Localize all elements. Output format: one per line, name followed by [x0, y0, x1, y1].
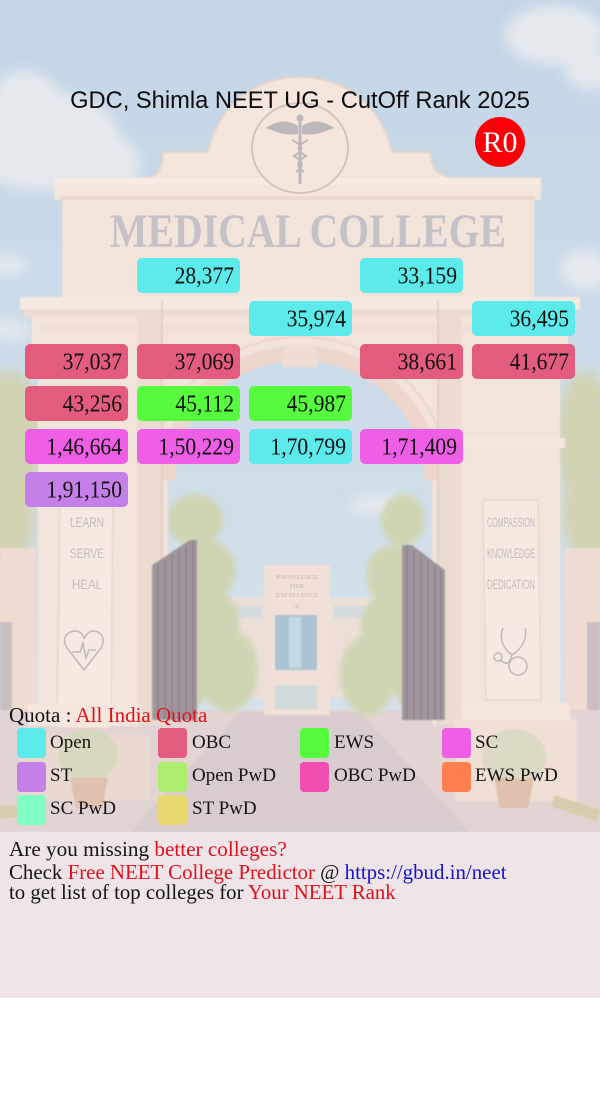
rank: OBC 43,256: 43,256 — [63, 390, 122, 417]
tower inscription: EXCELLENCE — [276, 592, 318, 599]
rank: OBC 38,661 — [360, 344, 463, 379]
rank: SC 1,71,409: 1,71,409 — [381, 433, 457, 460]
pier inscription: right: KNOWLEDGE — [487, 545, 535, 561]
rank: Open 33,159 — [360, 258, 463, 293]
legend: SC — [442, 728, 498, 758]
pier inscription: left: LEARN — [70, 514, 104, 530]
pier inscription: left — [70, 514, 104, 592]
rank: Open 1,70,799 — [249, 429, 352, 464]
rank: Open 28,377 — [137, 258, 240, 293]
promo line 1: Are you missing better colleges? — [9, 837, 287, 861]
icon: heart — [65, 631, 103, 670]
legend: OBC PwD — [300, 762, 416, 792]
rank: SC 1,71,409 — [360, 429, 463, 464]
rank: Open 28,377: 28,377 — [175, 262, 234, 289]
rank: ST 1,91,150 — [25, 472, 128, 507]
legend: SC PwD: SC PwD — [50, 798, 116, 819]
legend: EWS: EWS — [334, 732, 374, 753]
legend: EWS PwD: EWS PwD — [475, 765, 558, 786]
gates — [152, 540, 197, 720]
rank: Open 36,495 — [472, 301, 575, 336]
legend: SC PwD — [17, 795, 116, 825]
legend: OBC PwD: OBC PwD — [334, 765, 416, 786]
legend: Open: Open — [50, 732, 91, 753]
legend: EWS PwD — [442, 762, 558, 792]
rank: OBC 41,677 — [472, 344, 575, 379]
legend: OBC: OBC — [192, 732, 231, 753]
legend: ST — [17, 762, 72, 792]
tower inscription: FINE — [290, 583, 304, 590]
legend: SC: SC — [475, 732, 498, 753]
pier inscription: left: HEAL — [72, 576, 102, 592]
legend: Open — [17, 728, 91, 758]
rank: OBC 37,069: 37,069 — [175, 348, 234, 375]
promo line 3: to get list of top colleges for Your NEET Rank — [9, 881, 396, 904]
legend: OBC — [158, 728, 231, 758]
round badge — [475, 117, 525, 167]
rank grid — [25, 258, 575, 507]
tower inscription: + — [294, 601, 300, 613]
tower inscription: KNOWLEDGE — [276, 574, 318, 581]
round badge: R0 — [482, 126, 518, 159]
promo line 2: Check Free NEET College Predictor @ https://gbud.in/neet — [9, 860, 507, 884]
tower inscription — [276, 574, 318, 613]
title: GDC, Shimla NEET UG - CutOff Rank 2025 — [70, 88, 530, 114]
legend: ST PwD — [158, 795, 257, 825]
legend: ST: ST — [50, 765, 72, 786]
rank: EWS 45,112 — [137, 386, 240, 421]
rank: Open 1,70,799: 1,70,799 — [270, 433, 346, 460]
rank: Open 35,974: 35,974 — [287, 305, 346, 332]
legend: Open PwD — [158, 762, 276, 792]
pier inscription: left: SERVE — [70, 545, 104, 561]
caduceus emblem — [252, 103, 348, 193]
rank: OBC 37,069 — [137, 344, 240, 379]
rank: SC 1,50,229 — [137, 429, 240, 464]
rank: EWS 45,987: 45,987 — [287, 390, 346, 417]
rank: Open 33,159: 33,159 — [398, 262, 457, 289]
rank: SC 1,50,229: 1,50,229 — [158, 433, 234, 460]
quota line: Quota : All India Quota — [9, 703, 207, 727]
rank: SC 1,46,664 — [25, 429, 128, 464]
rank: ST 1,91,150: 1,91,150 — [46, 476, 122, 503]
pier inscription: right: DEDICATION — [487, 576, 535, 592]
rank: OBC 41,677: 41,677 — [510, 348, 569, 375]
building sign text: MEDICAL COLLEGE — [110, 205, 506, 258]
planters — [58, 729, 118, 781]
rank: OBC 43,256 — [25, 386, 128, 421]
pier inscription: right — [487, 514, 535, 592]
rank: EWS 45,987 — [249, 386, 352, 421]
legend: EWS — [300, 728, 374, 758]
background illustration: medical college gate — [0, 0, 600, 832]
rank: OBC 38,661: 38,661 — [398, 348, 457, 375]
legend: ST PwD: ST PwD — [192, 798, 257, 819]
legend — [17, 728, 558, 825]
rank: OBC 37,037 — [25, 344, 128, 379]
rank: EWS 45,112: 45,112 — [175, 390, 234, 417]
rank: Open 35,974 — [249, 301, 352, 336]
arch body — [62, 200, 534, 300]
panel: college predictor promo — [0, 832, 600, 998]
rank: Open 36,495: 36,495 — [510, 305, 569, 332]
rank: OBC 37,037: 37,037 — [63, 348, 122, 375]
piers panels — [453, 438, 565, 448]
rank: SC 1,46,664: 1,46,664 — [46, 433, 122, 460]
legend: Open PwD: Open PwD — [192, 765, 276, 786]
pier inscription: right: COMPASSION — [487, 514, 535, 530]
icon: stethoscope — [494, 628, 527, 675]
